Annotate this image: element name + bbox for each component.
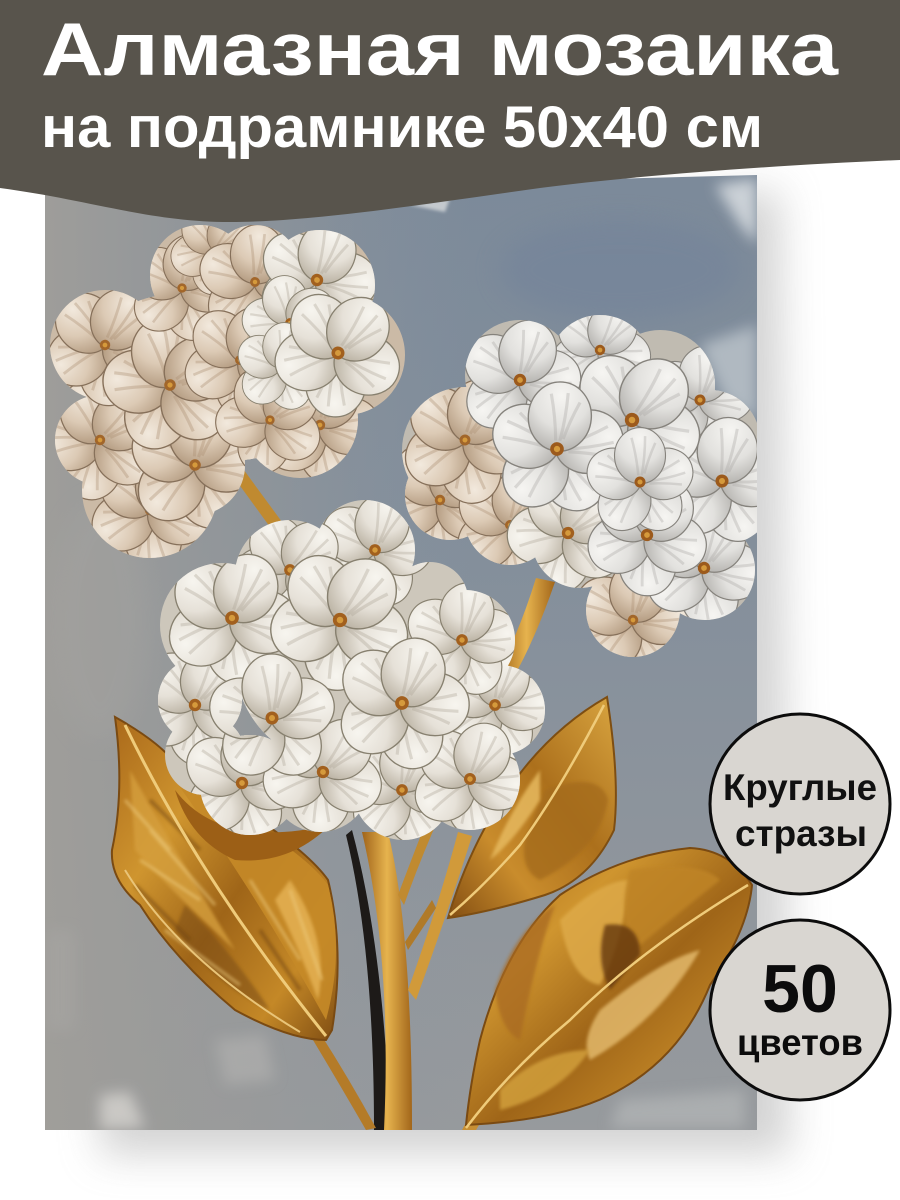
badge: 50 colours: цветов <box>737 1022 863 1063</box>
right gold leaf <box>466 848 752 1128</box>
badge: round rhinestones <box>710 714 890 894</box>
badge: round rhinestones: Круглые <box>723 767 877 808</box>
centre gold leaf <box>448 697 616 918</box>
flower cluster: top left <box>50 225 405 558</box>
canvas drop shadow <box>100 190 790 1155</box>
title <box>41 7 839 160</box>
header banner <box>0 0 900 222</box>
badge: 50 colours: 50 <box>762 951 838 1027</box>
painting on stretcher <box>45 175 757 1130</box>
title line 2: на подрамнике 50х40 см <box>41 95 763 160</box>
painted background <box>45 170 757 1135</box>
left gold leaf <box>112 717 338 1040</box>
stems <box>230 462 555 1130</box>
title line 1: Алмазная мозаика <box>41 7 839 91</box>
flower cluster: right <box>402 315 757 657</box>
badge: round rhinestones: стразы <box>735 813 867 854</box>
flower cluster: centre <box>158 500 545 840</box>
badge: 50 colours <box>710 920 890 1100</box>
